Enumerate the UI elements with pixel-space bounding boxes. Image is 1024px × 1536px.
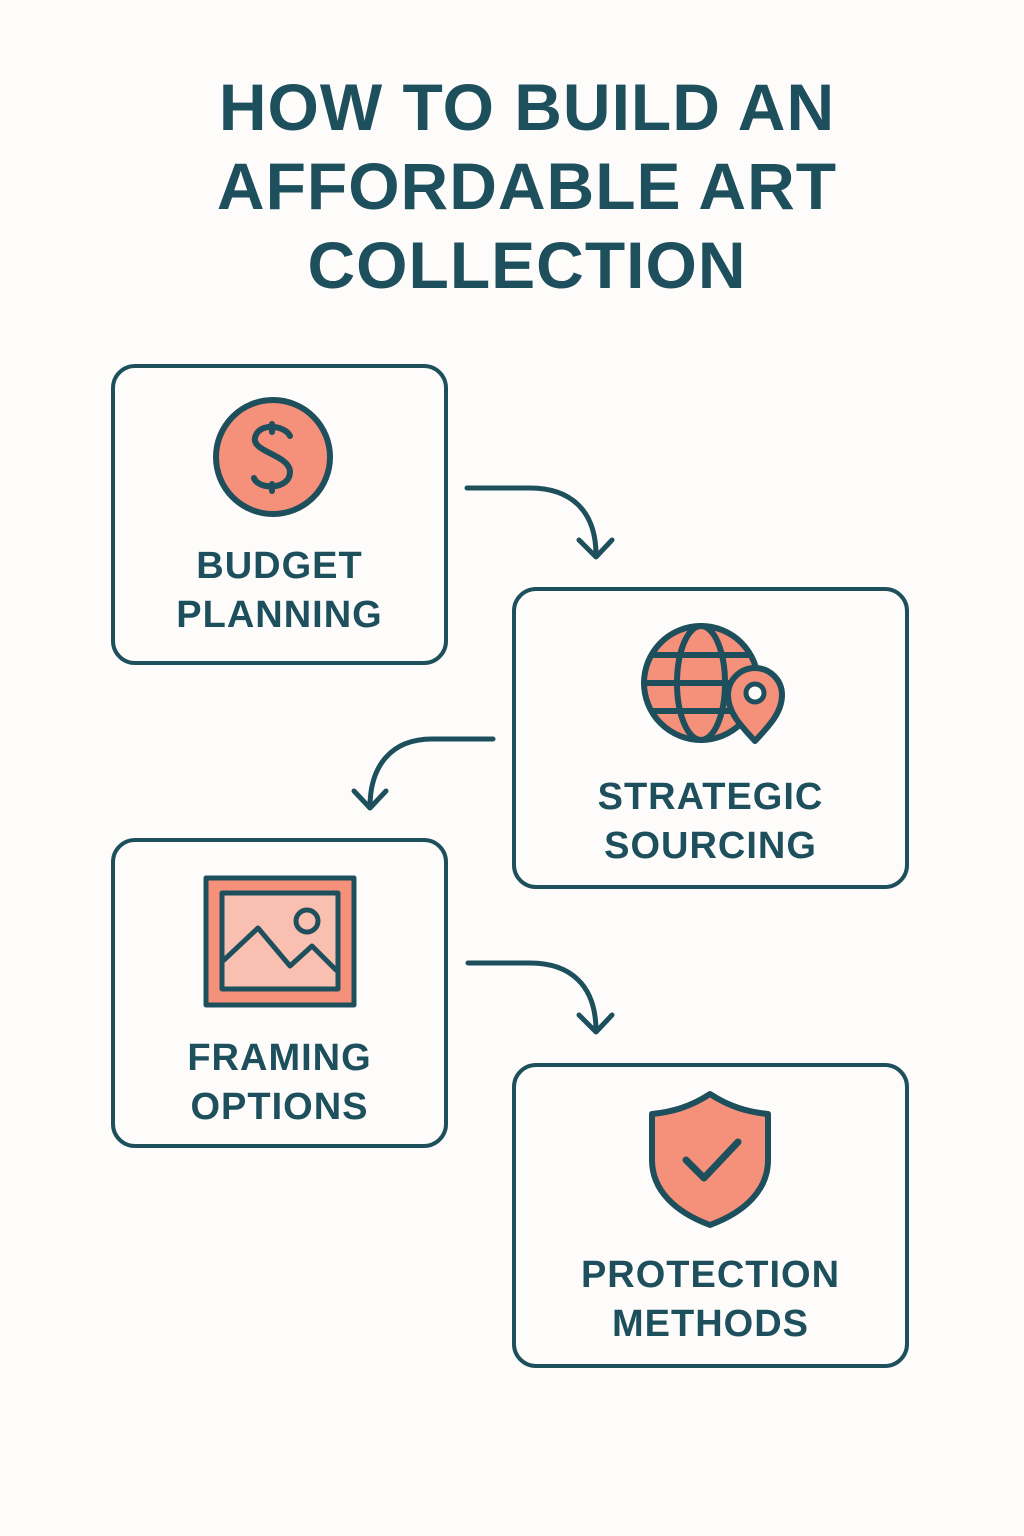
title: COLLECTION (308, 228, 746, 302)
label: protection methods: METHODS (612, 1303, 809, 1345)
panel: framing options (111, 838, 448, 1148)
label: framing options: OPTIONS (190, 1086, 369, 1128)
label: framing options (187, 1037, 372, 1128)
label: framing options: FRAMING (187, 1037, 372, 1079)
label: protection methods: PROTECTION (581, 1254, 840, 1296)
icon: picture frame (206, 878, 354, 1005)
label: protection methods (581, 1254, 840, 1345)
title: HOW TO BUILD AN (219, 70, 835, 144)
icon: dollar coin (216, 400, 330, 514)
title: AFFORDABLE ART (217, 149, 837, 223)
panel: protection methods (512, 1063, 909, 1368)
label: budget planning (176, 545, 383, 636)
icon: globe with pin (644, 626, 782, 741)
label: strategic sourcing: STRATEGIC (598, 776, 823, 818)
label: strategic sourcing (598, 776, 823, 867)
panel: strategic sourcing (512, 587, 909, 889)
title (217, 70, 837, 302)
label: budget planning: BUDGET (196, 545, 363, 587)
icon: shield with check (652, 1094, 768, 1225)
arrow: budget to sourcing (467, 488, 612, 557)
panel: budget planning (111, 364, 448, 665)
arrow: sourcing to framing (354, 739, 493, 808)
label: strategic sourcing: SOURCING (604, 825, 817, 867)
label: budget planning: PLANNING (176, 594, 383, 636)
arrow: framing to protection (468, 963, 612, 1032)
